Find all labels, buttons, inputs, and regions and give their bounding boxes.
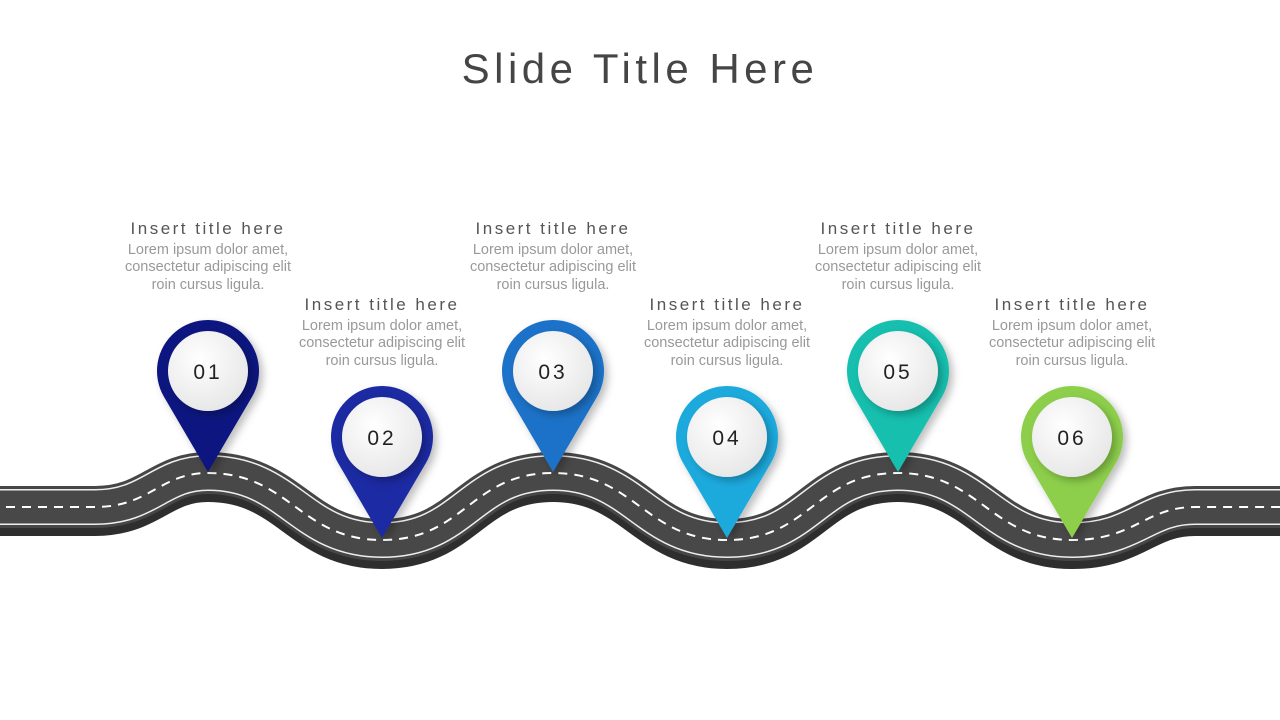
text block 6: Lorem ipsum dolor amet, [992, 318, 1152, 334]
text block 6: roin cursus ligula. [1016, 353, 1128, 369]
pin 01 [157, 320, 259, 472]
text block 6 [989, 295, 1155, 369]
text block 4: Insert title here [650, 295, 804, 314]
text block 3: Lorem ipsum dolor amet, [473, 242, 633, 258]
pin 05 [847, 320, 949, 472]
text block 3: roin cursus ligula. [497, 277, 609, 293]
pin 01: 01 [193, 361, 223, 384]
text block 1: Lorem ipsum dolor amet, [128, 242, 288, 258]
text block 3 [470, 219, 636, 293]
pin 06 [1021, 386, 1123, 538]
text block 4 [644, 295, 810, 369]
text block 1: consectetur adipiscing elit [125, 259, 291, 275]
text block 6: consectetur adipiscing elit [989, 335, 1155, 351]
pin 05: 05 [883, 361, 913, 384]
text block 2 [299, 295, 465, 369]
text block 3: consectetur adipiscing elit [470, 259, 636, 275]
pin 06: 06 [1057, 427, 1087, 450]
pin 02 [331, 386, 433, 538]
text block 6: Insert title here [995, 295, 1149, 314]
text block 1 [125, 219, 291, 293]
pin 03: 03 [538, 361, 568, 384]
text block 1: roin cursus ligula. [152, 277, 264, 293]
text block 4: roin cursus ligula. [671, 353, 783, 369]
pin 03 [502, 320, 604, 472]
pin 04 [676, 386, 778, 538]
text block 4: consectetur adipiscing elit [644, 335, 810, 351]
text block 3: Insert title here [476, 219, 630, 238]
text block 5: roin cursus ligula. [842, 277, 954, 293]
title: Slide Title Here [462, 45, 818, 92]
road [0, 473, 1280, 548]
text block 2: Lorem ipsum dolor amet, [302, 318, 462, 334]
text block 5: Insert title here [821, 219, 975, 238]
text block 5: consectetur adipiscing elit [815, 259, 981, 275]
text block 1: Insert title here [131, 219, 285, 238]
text block 5 [815, 219, 981, 293]
text block 2: consectetur adipiscing elit [299, 335, 465, 351]
text block 2: Insert title here [305, 295, 459, 314]
text block 2: roin cursus ligula. [326, 353, 438, 369]
pin 02: 02 [367, 427, 397, 450]
text block 4: Lorem ipsum dolor amet, [647, 318, 807, 334]
pin 04: 04 [712, 427, 742, 450]
text block 5: Lorem ipsum dolor amet, [818, 242, 978, 258]
